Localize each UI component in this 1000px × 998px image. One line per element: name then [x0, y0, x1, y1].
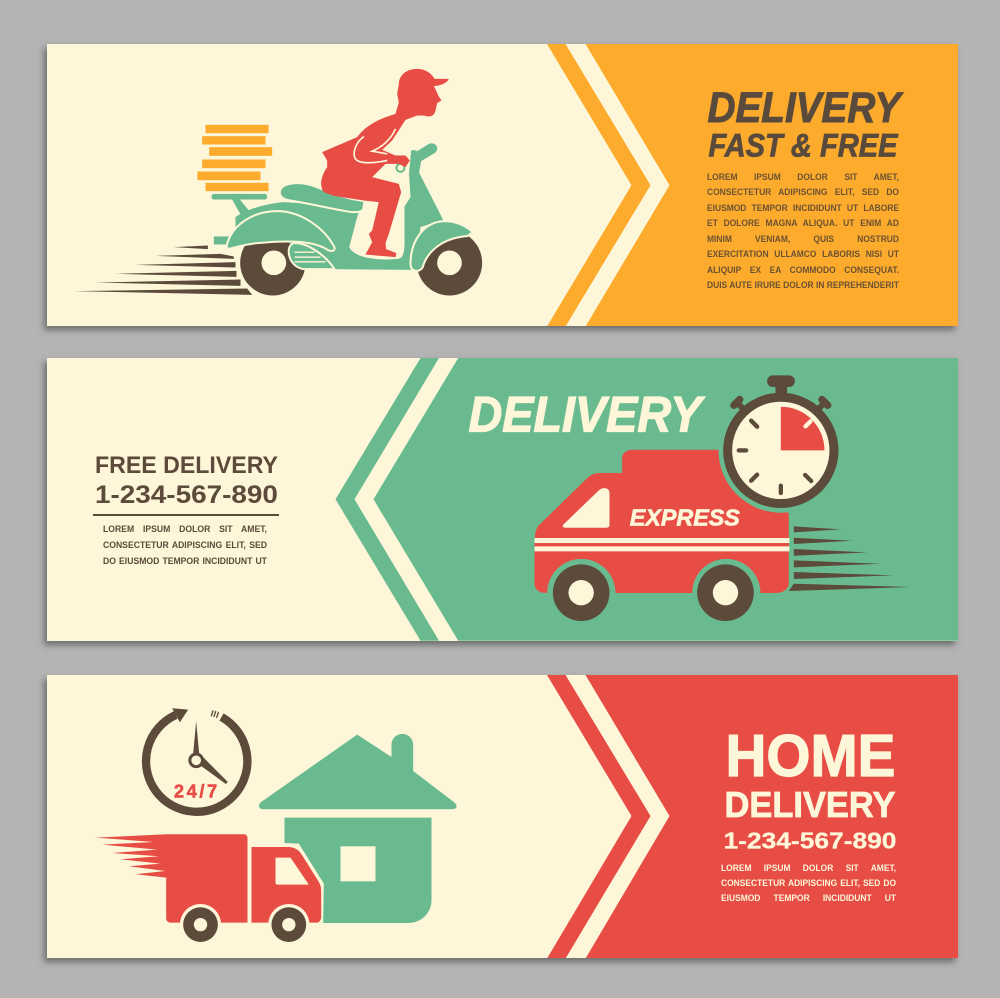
truck — [95, 834, 321, 945]
text block: lorem ipsum on cream — [103, 524, 267, 567]
heading: delivery: DELIVERY — [468, 387, 705, 443]
text block: lorem ipsum on red — [721, 863, 896, 904]
heading: phone number: 1-234-567-890 — [723, 827, 896, 853]
text block: lorem ipsum on cream: DO EIUSMOD TEMPOR INCIDIDUNT UT — [103, 556, 267, 567]
text block: lorem ipsum on orange: ET DOLORE MAGNA ALIQUA. UT ENIM AD — [707, 218, 899, 229]
heading: free delivery: FREE DELIVERY — [95, 452, 278, 479]
house roof — [258, 734, 456, 809]
van wheels — [552, 565, 753, 621]
chevron: green panel with stripes — [335, 358, 958, 641]
panel: free delivery express banner — [46, 358, 958, 641]
scooter rack — [211, 193, 267, 244]
speed lines — [73, 245, 252, 294]
text block: lorem ipsum on cream: LOREM IPSUM DOLOR SIT AMET, — [103, 524, 267, 535]
text block: lorem ipsum on red: EIUSMOD TEMPOR INCIDIDUNT UT — [721, 893, 896, 904]
van body — [534, 450, 788, 593]
text block: lorem ipsum on orange: EIUSMOD TEMPOR INCIDIDUNT UT LABORE — [707, 203, 899, 214]
chevron: orange panel with stripes — [546, 44, 958, 326]
house window — [340, 846, 375, 881]
text block: lorem ipsum on cream: CONSECTETUR ADIPISCING ELIT, SED — [103, 540, 267, 551]
clock 24/7: 24/7 — [173, 780, 217, 801]
heading: fast and free: FAST & FREE — [708, 127, 899, 163]
text block: lorem ipsum on orange — [707, 172, 899, 291]
chevron: red panel with stripes — [546, 675, 958, 958]
divider rule — [93, 514, 279, 516]
text block: lorem ipsum on orange: EXERCITATION ULLAMCO LABORIS NISI UT — [707, 249, 899, 260]
heading: home: HOME — [725, 723, 895, 789]
clock 24/7 — [146, 708, 247, 811]
panel: delivery fast and free banner — [46, 44, 958, 326]
text block: lorem ipsum on orange: CONSECTETUR ADIPISCING ELIT, SED DO — [707, 187, 899, 198]
handlebar and mirror — [396, 143, 437, 175]
heading: delivery: DELIVERY — [724, 784, 895, 825]
text block: lorem ipsum on red: LOREM IPSUM DOLOR SIT AMET, — [721, 863, 896, 874]
text block: lorem ipsum on orange: DUIS AUTE IRURE DOLOR IN REPREHENDERIT — [707, 280, 899, 291]
icon: express van with stopwatch — [534, 376, 910, 621]
stopwatch — [718, 376, 843, 513]
speed lines — [788, 527, 910, 591]
icon: truck, house and 24/7 clock — [95, 708, 456, 945]
house body — [284, 817, 431, 923]
scooter body — [226, 172, 472, 270]
icon: delivery rider on scooter with pizza boxes — [73, 68, 482, 298]
van label: EXPRESS — [629, 505, 739, 531]
van window — [562, 488, 609, 528]
text block: lorem ipsum on orange: ALIQUIP EX EA COMMODO CONSEQUAT. — [707, 265, 899, 276]
heading: delivery: DELIVERY — [707, 84, 903, 132]
text block: lorem ipsum on orange: MINIM VENIAM, QUIS NOSTRUD — [707, 234, 899, 245]
van stripes — [534, 538, 789, 552]
panel: home delivery banner — [46, 675, 958, 958]
text block: lorem ipsum on red: CONSECTETUR ADIPISCING ELIT, SED DO — [721, 878, 896, 889]
scooter wheels — [237, 227, 482, 298]
engine vents — [294, 252, 325, 261]
text block: lorem ipsum on orange: LOREM IPSUM DOLOR SIT AMET, — [707, 172, 899, 183]
rider silhouette — [321, 68, 448, 257]
pizza boxes — [197, 124, 272, 191]
heading: phone number: 1-234-567-890 — [95, 481, 278, 509]
